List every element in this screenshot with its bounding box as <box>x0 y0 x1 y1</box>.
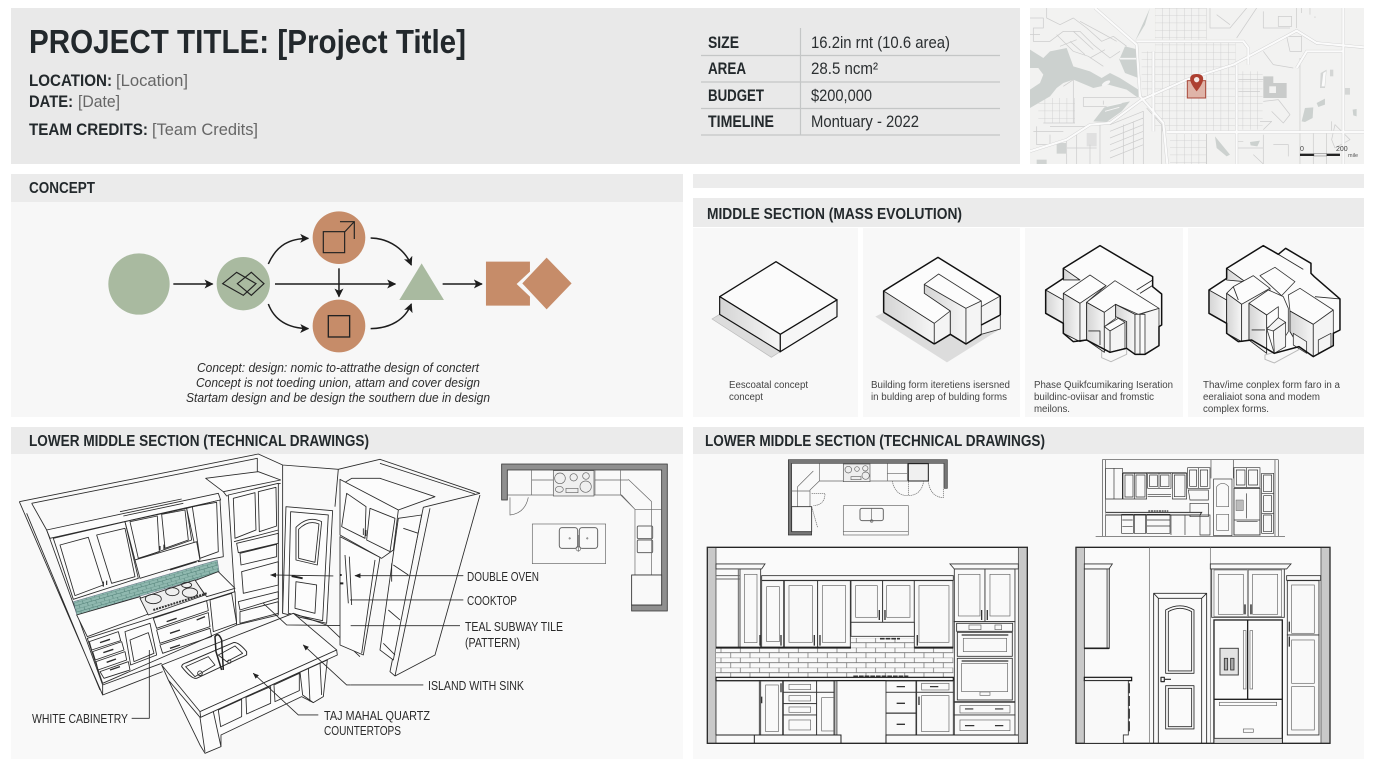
right side of kitchen <box>340 478 480 685</box>
label: teal subway tile: TEAL SUBWAY TILE <box>465 619 563 634</box>
project data table <box>701 28 1000 135</box>
site location map: mile <box>1348 153 1358 159</box>
leader lines <box>350 576 463 685</box>
mass step 1 <box>693 228 858 417</box>
label: countertops: TAJ MAHAL QUARTZ <box>324 708 430 723</box>
floor plan <box>502 464 667 611</box>
label: teal subway tile: (PATTERN) <box>465 635 520 650</box>
project data table: SIZE <box>708 33 739 52</box>
walls <box>19 454 480 695</box>
project data table: BUDGET <box>708 86 764 105</box>
small floor plan <box>788 460 947 535</box>
location line: [Location] <box>116 71 188 90</box>
heading: concept: CONCEPT <box>29 180 95 197</box>
left wall cabinets <box>1084 564 1132 743</box>
heading: technical drawings right: LOWER MIDDLE SECTION (TECHNICAL DRAWINGS) <box>705 433 1045 450</box>
panel: technical drawings right <box>693 427 1364 759</box>
date line: DATE: <box>29 92 73 111</box>
kitchen wall elevation <box>707 547 1027 743</box>
teal subway tile <box>73 560 219 615</box>
project data table: TIMELINE <box>708 112 774 131</box>
final massing shapes <box>486 258 572 309</box>
panel: mass evolution <box>693 198 1364 417</box>
triangle <box>399 263 444 300</box>
project data table: Montuary - 2022 <box>811 112 919 131</box>
location line <box>29 71 188 90</box>
overlap circle <box>217 257 270 310</box>
door <box>283 507 333 623</box>
base cabinets <box>716 676 1018 743</box>
isometric kitchen drawing <box>19 454 480 753</box>
base cabinets <box>87 592 237 683</box>
arrow <box>443 282 482 286</box>
project data table: AREA <box>708 59 746 78</box>
heading: mass evolution: MIDDLE SECTION (MASS EVOLUTION) <box>707 206 962 223</box>
mass step 2 <box>863 228 1020 417</box>
project data table: 28.5 ncm² <box>811 59 878 78</box>
mass step 3: Phase Quikfcumikaring Iseration <box>1034 380 1173 391</box>
counter and cooktop <box>77 572 235 637</box>
mass step 4: Thav/ime conplex form faro in a <box>1203 380 1340 391</box>
empty header strip <box>693 174 1364 188</box>
concept caption <box>186 361 490 405</box>
door <box>1154 593 1207 743</box>
mass step 3: meilons. <box>1034 404 1070 415</box>
heading: technical drawings left: LOWER MIDDLE SECTION (TECHNICAL DRAWINGS) <box>29 433 369 450</box>
arrow <box>173 282 213 286</box>
leader lines <box>132 575 360 718</box>
project data table: $200,000 <box>811 86 872 105</box>
mass step 2: in bulding arep of bulding forms <box>871 392 1007 403</box>
mass step 1: Eescoatal concept <box>729 380 808 391</box>
concept caption: Concept is not toeding union, attam and cover design <box>196 376 480 390</box>
title: PROJECT TITLE: [Project Title] <box>29 23 466 60</box>
label: white cabinetry: WHITE CABINETRY <box>32 711 128 726</box>
mass step 2: Building form iteretiens isersned <box>871 380 1010 391</box>
label: island with sink: ISLAND WITH SINK <box>428 678 524 693</box>
backsplash <box>716 638 953 677</box>
lower terracotta circle <box>313 300 365 352</box>
refrigerator <box>1214 620 1282 743</box>
site location map <box>1030 8 1364 164</box>
panel: kitchen perspective <box>11 427 683 759</box>
concept caption: Concept: design: nomic to-attrathe design of conctert <box>197 361 479 375</box>
date line <box>29 92 120 111</box>
map marker <box>1187 74 1206 98</box>
panel: concept <box>11 174 683 417</box>
island <box>162 613 337 753</box>
upper cabinets over fridge <box>1210 564 1291 617</box>
upper cabinets <box>47 493 223 599</box>
concept caption: Startam design and be design the southern due in design <box>186 391 490 405</box>
site location map: 0 <box>1300 146 1304 153</box>
curved arrows <box>268 238 411 329</box>
label: countertops <box>324 708 430 738</box>
pantry cabinet <box>1287 576 1321 735</box>
small full elevation <box>1096 460 1285 537</box>
mass step 4: complex forms. <box>1203 404 1269 415</box>
mass step 3: buildinc-oviisar and fromstic <box>1034 392 1154 403</box>
map scale bar <box>1300 154 1340 156</box>
location line: LOCATION: <box>29 71 112 90</box>
label: countertops: COUNTERTOPS <box>324 723 401 738</box>
minor streets <box>1030 8 1127 66</box>
site location map: 200 <box>1336 146 1348 153</box>
side wall elevation <box>1076 547 1330 743</box>
concept flow diagram <box>108 211 572 352</box>
team credits line <box>29 120 258 139</box>
team credits line: TEAM CREDITS: <box>29 120 148 139</box>
upper cabinets <box>716 564 953 648</box>
team credits line: [Team Credits] <box>152 120 258 139</box>
upper terracotta circle <box>313 211 365 264</box>
label: cooktop: COOKTOP <box>467 593 517 608</box>
mass step 1: concept <box>729 392 763 403</box>
start circle <box>108 253 170 315</box>
project data table: 16.2in rnt (10.6 area) <box>811 33 950 52</box>
label: double oven: DOUBLE OVEN <box>467 569 539 584</box>
oven tower <box>950 564 1018 735</box>
label: teal subway tile <box>465 619 563 650</box>
date line: [Date] <box>78 92 120 111</box>
tall oven cabinet <box>206 472 281 625</box>
mass step 3 <box>1025 228 1183 417</box>
mass step 4: eeraliaiot sona and modem <box>1203 392 1320 403</box>
panel: project header <box>11 8 1020 164</box>
mass step 4 <box>1188 228 1364 417</box>
